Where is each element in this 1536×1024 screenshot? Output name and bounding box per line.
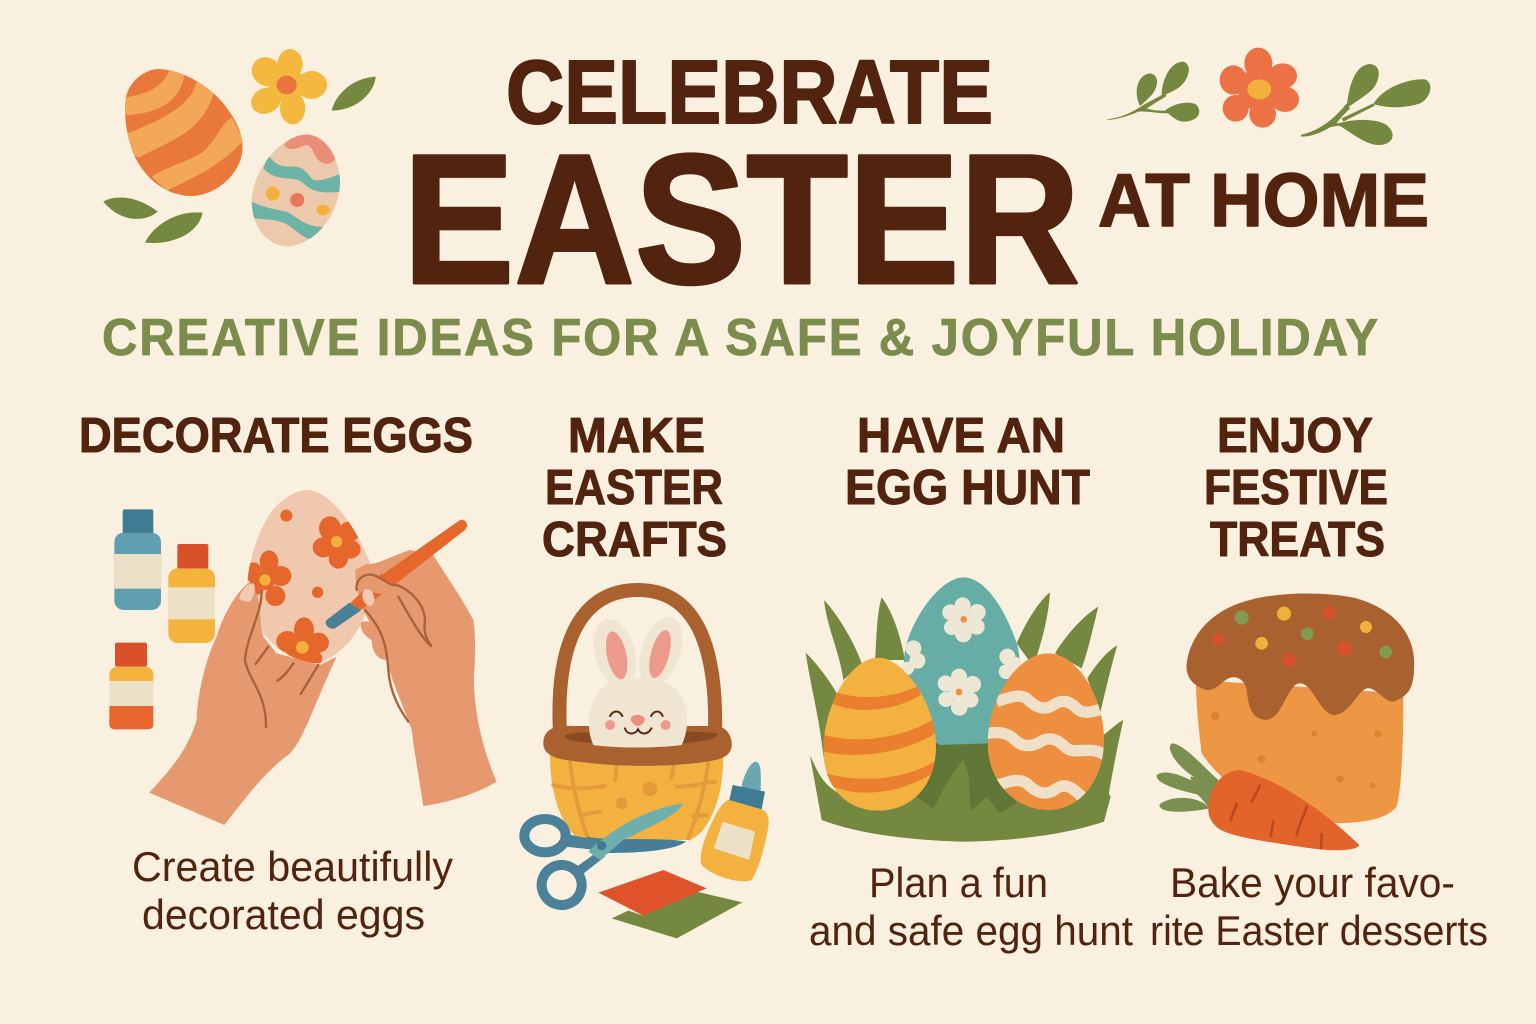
panel: have an egg hunt (806, 409, 1133, 954)
panel: decorate eggs (79, 409, 497, 938)
title: Celebrate Easter at Home: EASTER (403, 117, 1080, 323)
icon: yellow striped egg (820, 655, 938, 813)
icon: right hand holding brush (326, 520, 497, 806)
heading: enjoy festive treats: TREATS (1210, 513, 1385, 567)
illustration: cake and carrot (1157, 594, 1414, 850)
decoration: eggs, flower and leaves top left (103, 49, 376, 248)
description: decorate eggs (132, 843, 453, 938)
heading: make easter crafts: MAKE (568, 409, 705, 463)
icon: craft paper (598, 870, 742, 938)
icon: orange paint bottle (109, 643, 153, 729)
icon: blue paint bottle (114, 509, 162, 610)
heading: make easter crafts: CRAFTS (542, 513, 727, 567)
icon: yellow paint bottle (168, 544, 215, 643)
description: have an egg hunt: Plan a fun (869, 859, 1048, 906)
illustration: basket, bunny and craft supplies (524, 590, 769, 938)
heading: make easter crafts: EASTER (545, 461, 723, 515)
subtitle: CREATIVE IDEAS FOR A SAFE & JOYFUL HOLIDAY (102, 309, 1380, 367)
title: Celebrate Easter at Home (403, 43, 1429, 323)
icon: grass (806, 592, 1123, 842)
description: enjoy festive treats: rite Easter desserts (1150, 907, 1488, 954)
icon: basket handle (559, 590, 715, 733)
description: enjoy festive treats: Bake your favo- (1170, 859, 1455, 906)
illustration: hands painting an egg (109, 490, 497, 825)
heading: have an egg hunt (845, 409, 1090, 515)
title: Celebrate Easter at Home: AT HOME (1098, 158, 1429, 242)
icon: leaves (103, 77, 376, 243)
icon: teal egg with flowers (900, 575, 1023, 747)
icon: glue bottle (701, 762, 769, 881)
icon: carrot (1157, 743, 1359, 850)
heading: make easter crafts (542, 409, 727, 567)
icon: decorated egg (247, 490, 370, 664)
description: decorate eggs: decorated eggs (142, 891, 425, 938)
heading: enjoy festive treats: ENJOY (1217, 409, 1373, 463)
heading: have an egg hunt: HAVE AN (857, 409, 1065, 463)
description: enjoy festive treats (1150, 859, 1488, 954)
icon: grass shadow (917, 742, 1017, 813)
icon: orange flower (1220, 48, 1299, 128)
icon: cake (1186, 594, 1414, 823)
heading: have an egg hunt: EGG HUNT (845, 461, 1090, 515)
description: decorate eggs: Create beautifully (132, 843, 453, 890)
icon: bunny (587, 611, 690, 747)
icon: left sprig (1107, 62, 1199, 122)
panel: make easter crafts (524, 409, 769, 938)
icon: striped orange egg (125, 69, 243, 196)
title: Celebrate Easter at Home: CELEBRATE (506, 43, 993, 143)
icon: orange wavy egg (985, 652, 1107, 812)
panel: enjoy festive treats (1150, 409, 1488, 954)
illustration: eggs in grass (806, 575, 1123, 842)
icon: painted pastel egg (250, 132, 343, 248)
heading: enjoy festive treats (1204, 409, 1388, 567)
description: have an egg hunt: and safe egg hunt (809, 907, 1133, 954)
icon: basket (543, 726, 732, 840)
icon: yellow flower (246, 49, 327, 124)
heading: enjoy festive treats: FESTIVE (1204, 461, 1388, 515)
heading: decorate eggs: DECORATE EGGS (79, 409, 473, 463)
description: have an egg hunt (809, 859, 1133, 954)
decoration: sprigs and flower top right (1107, 48, 1430, 145)
icon: scissors (524, 803, 686, 912)
icon: right sprig (1301, 64, 1430, 145)
icon: left hand (149, 583, 337, 825)
